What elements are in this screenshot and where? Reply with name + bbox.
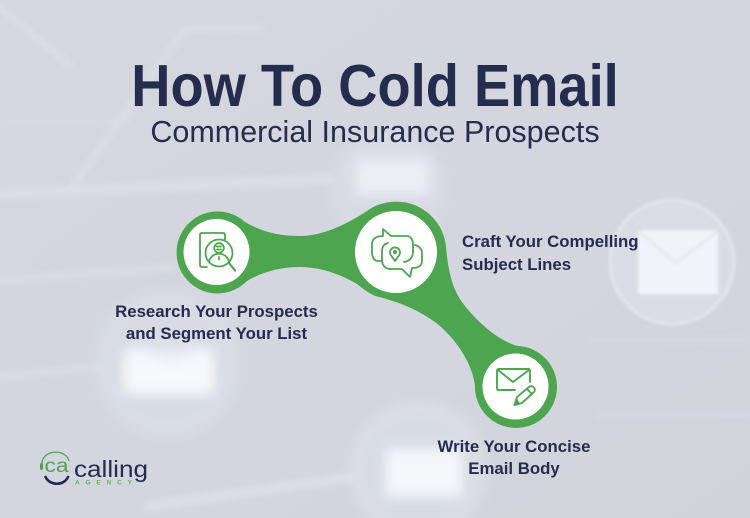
icon: speech bubbles with light bulb xyxy=(372,229,422,277)
step 2 circle xyxy=(355,211,437,293)
label: step 3: Write Your Concise xyxy=(438,437,590,456)
icon: envelope with pencil xyxy=(497,369,535,405)
label: step 2: Subject Lines xyxy=(462,254,571,274)
label: step 1: Research Your Prospects xyxy=(115,302,318,321)
logo: calling agency: calling xyxy=(74,456,148,482)
subtitle: Commercial Insurance Prospects xyxy=(150,115,600,149)
icon: document with magnifier and person xyxy=(200,233,235,270)
label: step 1: and Segment Your List xyxy=(126,324,307,343)
label: step 2: Craft Your Compelling xyxy=(462,232,639,251)
logo: calling agency: ca xyxy=(44,456,69,477)
label: step 3 xyxy=(438,437,590,478)
title: How To Cold Email xyxy=(131,53,619,119)
step 3 circle xyxy=(482,354,548,420)
label: step 1 xyxy=(115,302,318,343)
label: step 2 xyxy=(462,232,639,274)
step 1 circle xyxy=(184,219,250,285)
connector band xyxy=(177,202,557,428)
label: step 3: Email Body xyxy=(468,459,560,478)
logo: calling agency: AGENCY xyxy=(75,480,133,486)
